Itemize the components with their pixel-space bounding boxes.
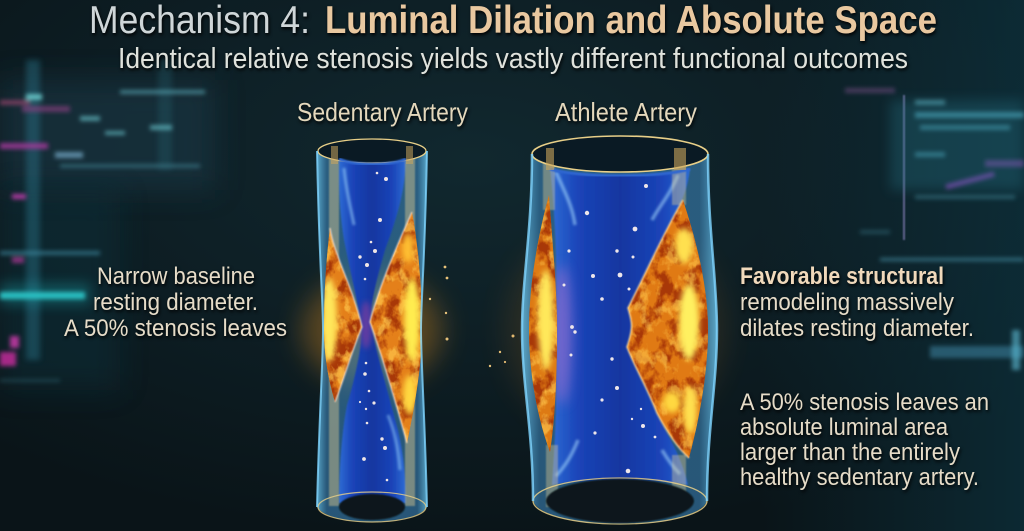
sparks between arteries <box>429 266 514 367</box>
wall strips <box>329 146 415 506</box>
text block: athlete absolute area <box>740 389 989 491</box>
text block: athlete remodeling: dilates resting diameter. <box>740 315 974 342</box>
heading: Athlete Artery: Athlete Artery <box>555 97 697 127</box>
text block: sedentary description: A 50% stenosis leaves <box>64 315 287 342</box>
plaque: right <box>625 198 710 460</box>
plaque: left <box>324 228 362 402</box>
lumen: narrowed channel <box>339 160 406 503</box>
title: Luminal Dilation and Absolute Space <box>325 0 937 42</box>
text block: athlete absolute area: larger than the entirely <box>740 439 960 466</box>
text block: athlete remodeling: remodeling massively <box>740 289 954 316</box>
artery illustration: athlete <box>505 136 725 524</box>
text block: sedentary description: resting diameter. <box>93 289 258 316</box>
text block: sedentary description: Narrow baseline <box>97 263 255 290</box>
plaque: right <box>368 210 424 446</box>
artery illustration: sedentary <box>302 139 442 522</box>
subtitle: Identical relative stenosis yields vastly different functional outcomes <box>118 43 908 75</box>
title: Mechanism 4: <box>89 0 310 42</box>
wall strips <box>543 150 686 507</box>
lumen rims <box>318 139 426 163</box>
blood particles <box>562 184 656 473</box>
text block: athlete absolute area: absolute luminal area <box>740 414 949 441</box>
text block: athlete absolute area: A 50% stenosis leaves an <box>740 389 989 416</box>
blood particles <box>358 172 388 481</box>
plaque: left <box>529 195 557 452</box>
text block: athlete remodeling <box>740 263 974 342</box>
heading: Sedentary Artery: Sedentary Artery <box>297 97 468 127</box>
lumen: wide channel <box>550 168 690 485</box>
text block: sedentary description <box>64 263 287 342</box>
plaque edges <box>330 212 412 443</box>
text block: athlete remodeling: Favorable structural <box>740 263 944 290</box>
lumen rims <box>532 136 708 172</box>
text block: athlete absolute area: healthy sedentary artery. <box>740 464 979 491</box>
title <box>89 0 937 42</box>
